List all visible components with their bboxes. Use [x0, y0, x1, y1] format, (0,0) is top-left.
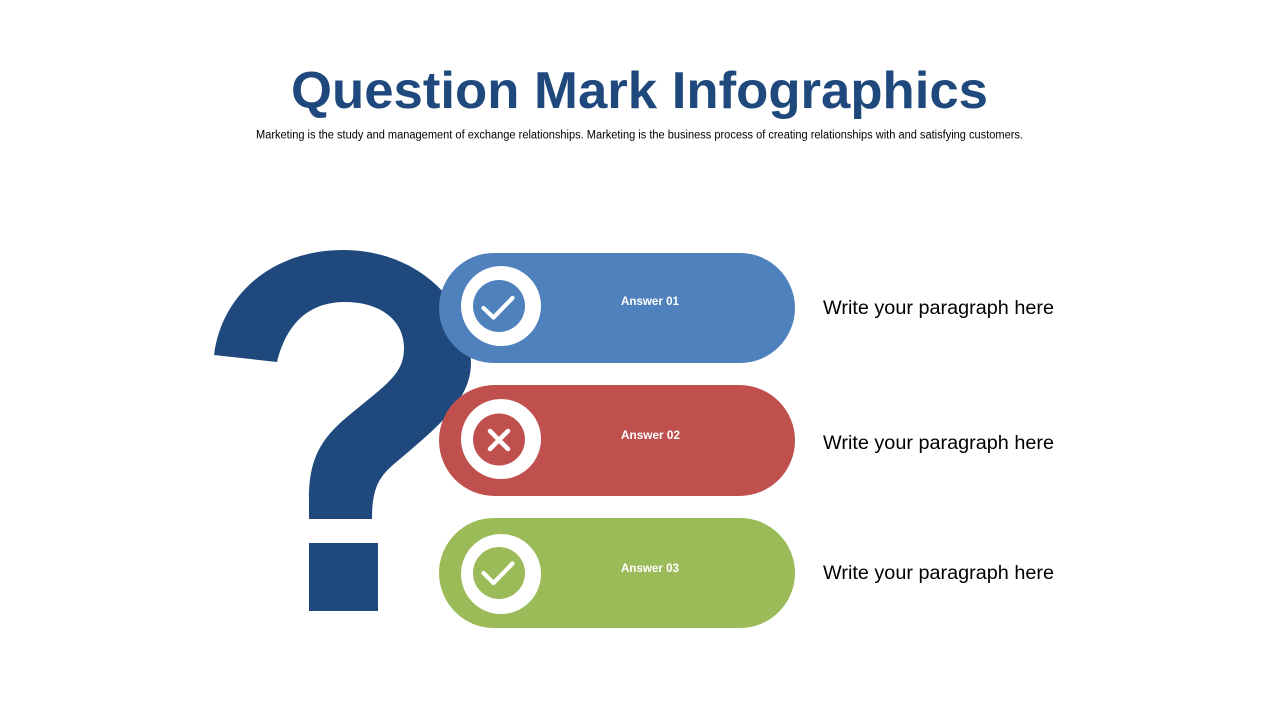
title: Question Mark Infographics	[291, 62, 988, 120]
label: answer 01: Answer 01	[621, 296, 680, 308]
text block: paragraph 2: Write your paragraph here	[823, 433, 1054, 454]
icon: check mark	[484, 564, 512, 583]
icon: check mark	[484, 298, 512, 318]
panel: answer 02	[439, 385, 795, 496]
subtitle: Marketing is the study and management of exchange relationships. Marketing is the business process of creating relationships with and satisfying customers.	[256, 130, 1023, 142]
label: answer 03: Answer 03	[621, 563, 679, 575]
text block: paragraph 1: Write your paragraph here	[823, 298, 1054, 319]
panel: answer 03	[439, 518, 795, 628]
label: answer 02: Answer 02	[621, 430, 680, 442]
text block: paragraph 3: Write your paragraph here	[823, 563, 1054, 584]
icon: cross mark	[490, 431, 508, 449]
panel: answer 01	[439, 253, 795, 363]
icon: question mark	[214, 250, 471, 611]
